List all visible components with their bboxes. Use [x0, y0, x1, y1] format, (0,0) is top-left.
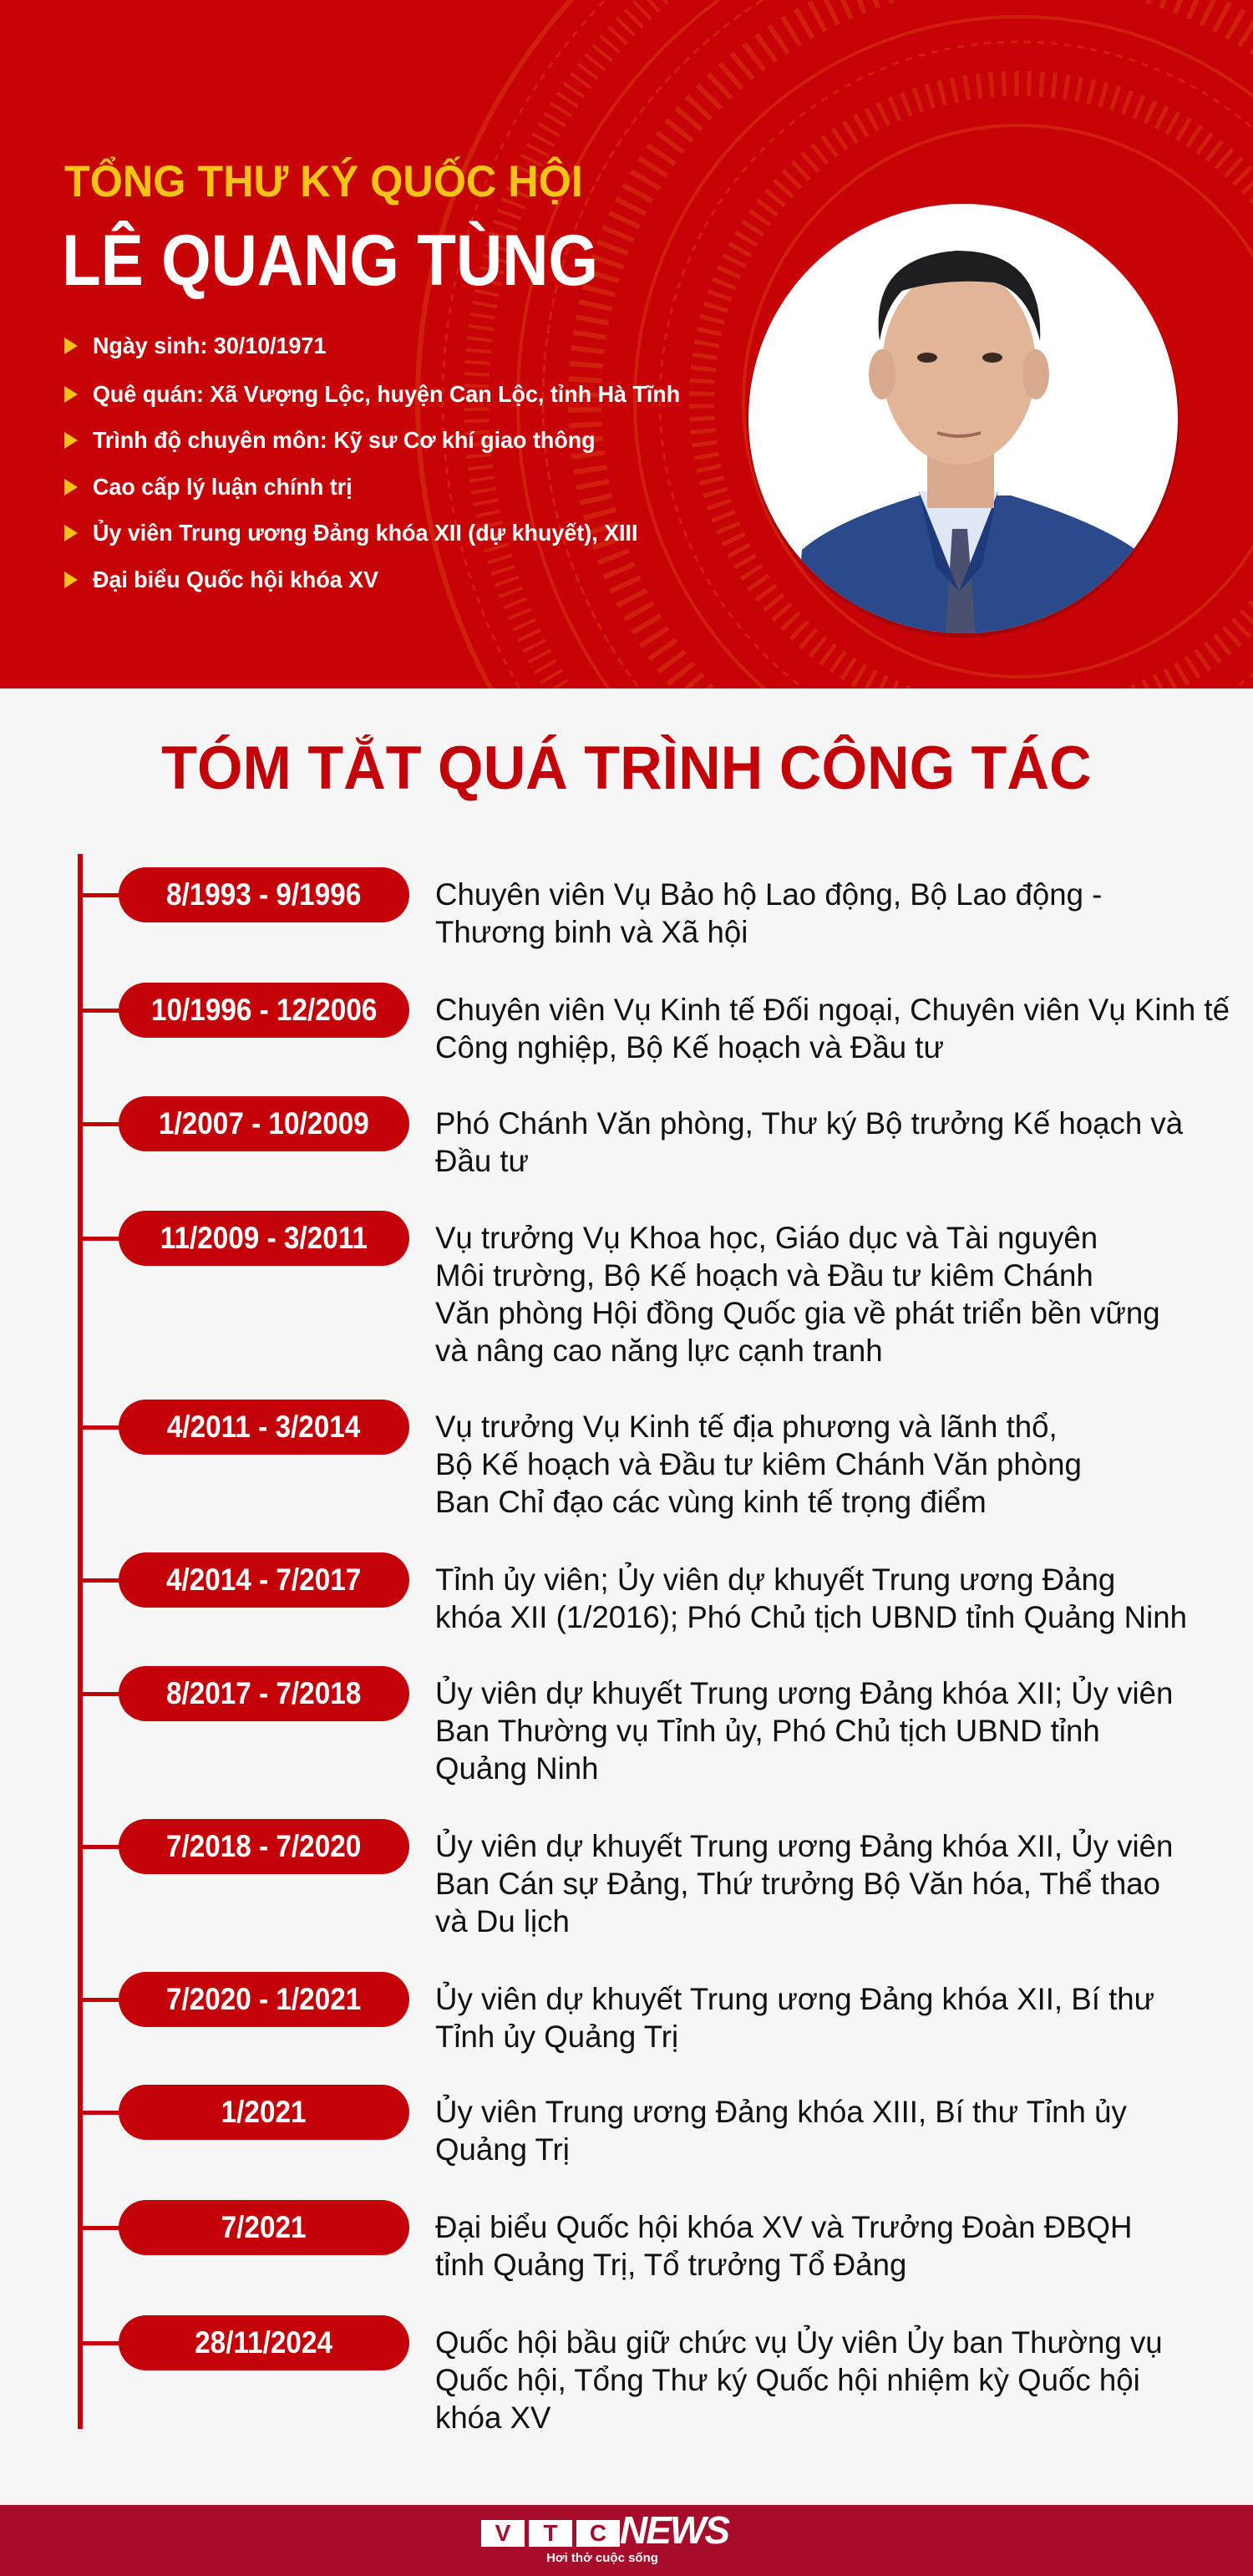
entry 5	[83, 1400, 1082, 1519]
entry 11	[83, 2200, 1132, 2282]
text: và Du lịch	[435, 1904, 570, 1938]
text: Tỉnh ủy Quảng Trị	[435, 2020, 678, 2054]
text: 8/2017 - 7/2018	[166, 1676, 362, 1710]
logo: VTC News: V	[495, 2520, 510, 2546]
logo: VTC News: T	[543, 2520, 558, 2546]
text: 4/2014 - 7/2017	[166, 1562, 362, 1597]
entry 7	[83, 1666, 1173, 1786]
text: Ban Chỉ đạo các vùng kinh tế trọng điểm	[435, 1485, 987, 1519]
entry 8	[83, 1819, 1173, 1938]
text: 8/1993 - 9/1996	[166, 877, 362, 912]
logo: VTC News: Hơi thở cuộc sống	[546, 2551, 658, 2565]
text: 7/2020 - 1/2021	[166, 1982, 362, 2016]
logo: VTC News: C	[590, 2520, 606, 2546]
text: Phó Chánh Văn phòng, Thư ký Bộ trưởng Kế hoạch và	[435, 1106, 1183, 1141]
text: Đại biểu Quốc hội khóa XV và Trưởng Đoàn ĐBQH	[435, 2210, 1132, 2244]
section heading: TÓM TẮT QUÁ TRÌNH CÔNG TÁC	[161, 734, 1092, 802]
entry 12	[83, 2315, 1163, 2435]
text: 1/2021	[221, 2095, 307, 2129]
name: LÊ QUANG TÙNG	[62, 221, 598, 301]
text: Tỉnh ủy viên; Ủy viên dự khuyết Trung ương Đảng	[435, 1562, 1115, 1597]
text: Ủy viên dự khuyết Trung ương Đảng khóa XII, Ủy viên	[435, 1829, 1173, 1863]
text: Ủy viên Trung ương Đảng khóa XIII, Bí thư Tỉnh ủy	[435, 2095, 1127, 2129]
text: Chuyên viên Vụ Kinh tế Đối ngoại, Chuyên viên Vụ Kinh tế	[435, 993, 1230, 1027]
text: Đầu tư	[435, 1144, 529, 1178]
text: Quốc hội bầu giữ chức vụ Ủy viên Ủy ban Thường vụ	[435, 2325, 1163, 2360]
bullet list	[64, 333, 680, 592]
text: Vụ trưởng Vụ Khoa học, Giáo dục và Tài nguyên	[435, 1221, 1098, 1255]
text: Ban Cán sự Đảng, Thứ trưởng Bộ Văn hóa, Thể thao	[435, 1867, 1160, 1901]
entry 1	[83, 867, 1102, 949]
text: 4/2011 - 3/2014	[167, 1410, 361, 1444]
text: Thương binh và Xã hội	[435, 915, 748, 949]
text: khóa XV	[435, 2401, 550, 2435]
portrait photo	[747, 204, 1179, 638]
text: Quảng Trị	[435, 2132, 570, 2167]
bullet: central committee: Ủy viên Trung ương Đảng khóa XII (dự khuyết), XIII	[93, 520, 637, 546]
text: Ban Thường vụ Tỉnh ủy, Phó Chủ tịch UBND tỉnh	[435, 1714, 1100, 1748]
text: 1/2007 - 10/2009	[159, 1106, 369, 1141]
text: Văn phòng Hội đồng Quốc gia về phát triển bền vững	[435, 1296, 1160, 1330]
text: Ủy viên dự khuyết Trung ương Đảng khóa XII, Bí thư	[435, 1982, 1154, 2016]
title: Tổng thư ký Quốc hội: TỔNG THƯ KÝ QUỐC HỘI	[64, 157, 583, 206]
entry 3	[83, 1096, 1183, 1178]
bullet: birth: Ngày sinh: 30/10/1971	[93, 333, 326, 358]
text: 10/1996 - 12/2006	[151, 993, 377, 1027]
logo: VTC News: NEWS	[620, 2508, 728, 2552]
bullet: profession: Trình độ chuyên môn: Kỹ sư Cơ khí giao thông	[93, 427, 596, 453]
text: Chuyên viên Vụ Bảo hộ Lao động, Bộ Lao động -	[435, 877, 1102, 912]
text: 11/2009 - 3/2011	[160, 1221, 368, 1255]
text: Môi trường, Bộ Kế hoạch và Đầu tư kiêm Chánh	[435, 1258, 1093, 1293]
text: khóa XII (1/2016); Phó Chủ tịch UBND tỉnh Quảng Ninh	[435, 1600, 1187, 1634]
logo: VTC News	[481, 2508, 730, 2565]
entry 4	[83, 1211, 1160, 1368]
entry 2	[83, 983, 1230, 1064]
text: Vụ trưởng Vụ Kinh tế địa phương và lãnh thổ,	[435, 1410, 1058, 1444]
header panel	[0, 0, 1253, 688]
timeline vertical line	[78, 854, 83, 2429]
text: 7/2021	[221, 2210, 307, 2244]
bullet: hometown: Quê quán: Xã Vượng Lộc, huyện Can Lộc, tỉnh Hà Tĩnh	[93, 381, 680, 407]
text: Bộ Kế hoạch và Đầu tư kiêm Chánh Văn phòng	[435, 1447, 1082, 1481]
text: tỉnh Quảng Trị, Tổ trưởng Tổ Đảng	[435, 2248, 906, 2282]
text: 28/11/2024	[195, 2325, 332, 2360]
footer band	[0, 2505, 1253, 2576]
decorative drum pattern	[415, 0, 1253, 688]
text: 7/2018 - 7/2020	[166, 1829, 362, 1863]
entry 10	[83, 2085, 1127, 2167]
timeline	[78, 854, 83, 2429]
text: Công nghiệp, Bộ Kế hoạch và Đầu tư	[435, 1030, 944, 1064]
text: và nâng cao năng lực cạnh tranh	[435, 1334, 883, 1368]
entry 6	[83, 1552, 1187, 1634]
bullet: politics: Cao cấp lý luận chính trị	[93, 474, 353, 500]
text: Ủy viên dự khuyết Trung ương Đảng khóa XII; Ủy viên	[435, 1676, 1173, 1710]
bullet: deputy: Đại biểu Quốc hội khóa XV	[93, 567, 378, 592]
text: Quảng Ninh	[435, 1751, 598, 1786]
text: Quốc hội, Tổng Thư ký Quốc hội nhiệm kỳ Quốc hội	[435, 2363, 1140, 2397]
entry 9	[83, 1972, 1154, 2054]
